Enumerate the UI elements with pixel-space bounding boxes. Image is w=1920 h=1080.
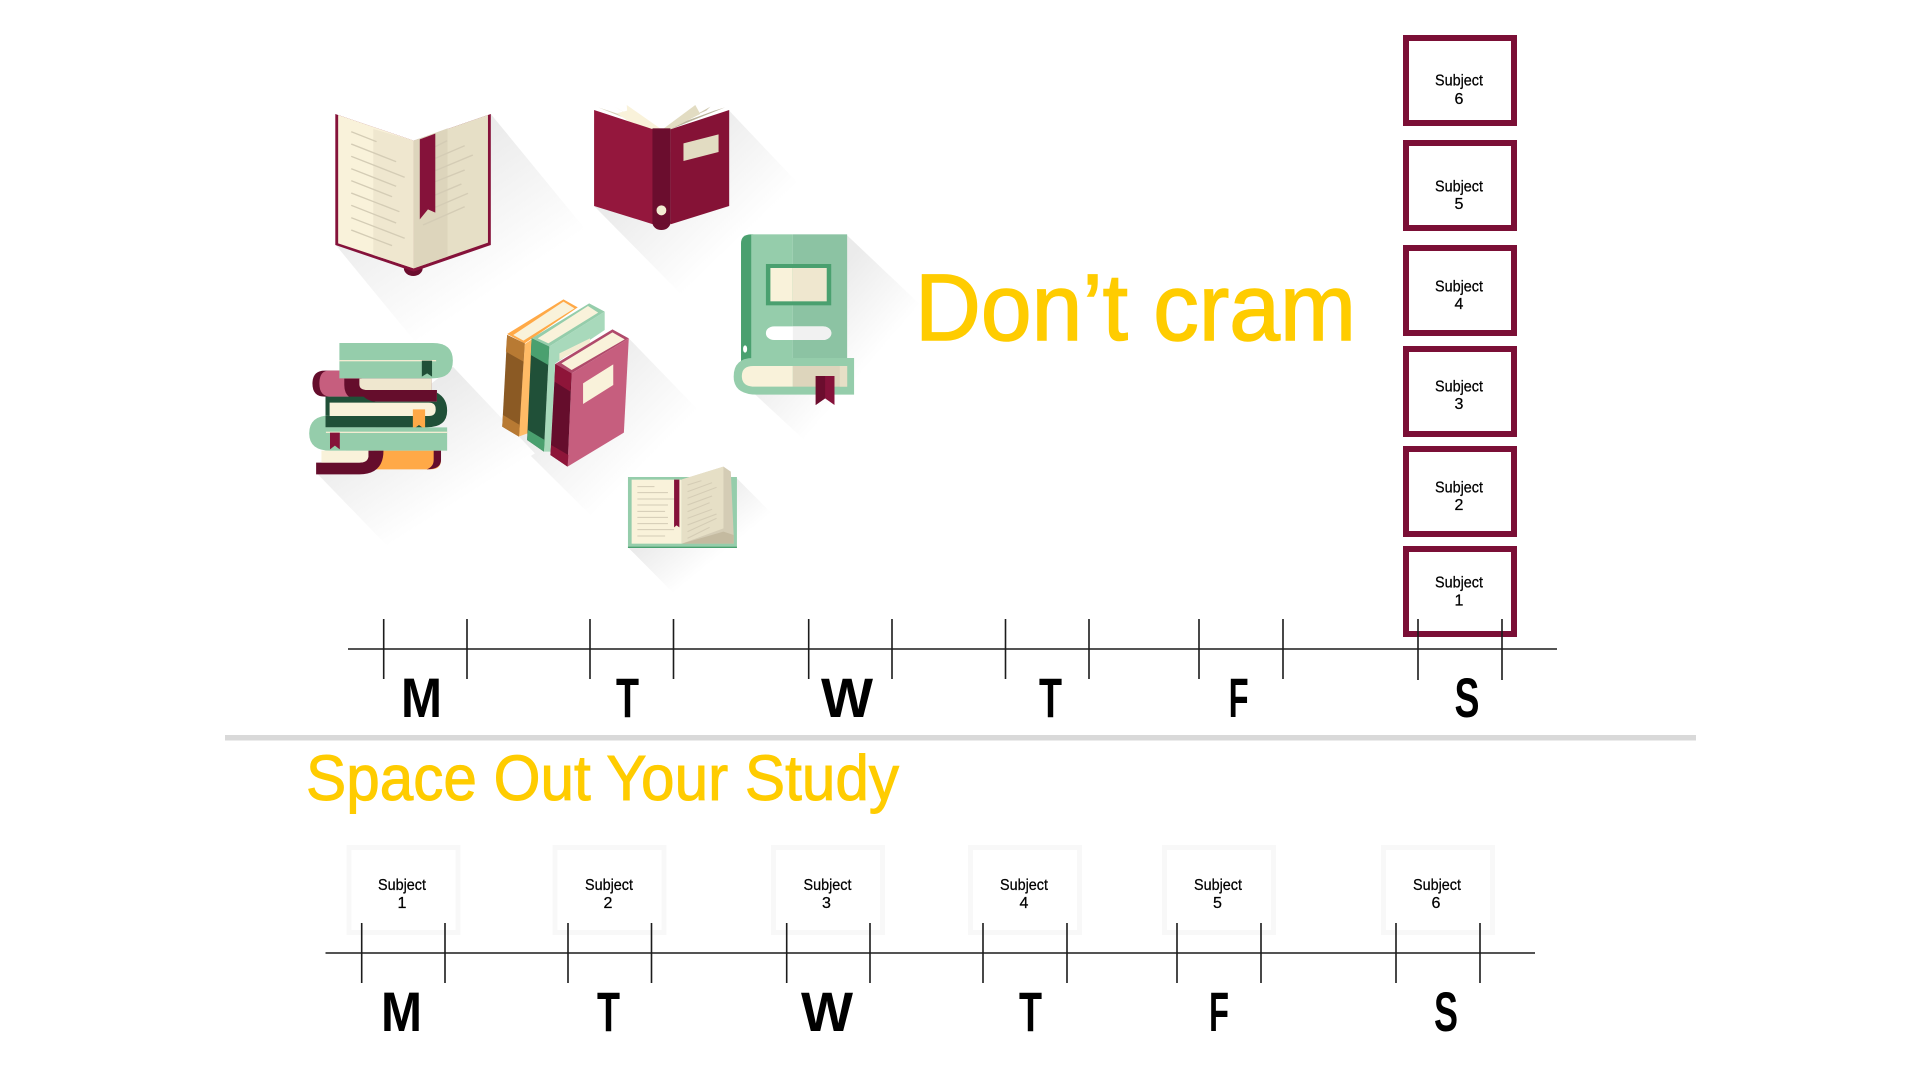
timeline: cramming week [348,619,1557,729]
subject card 1 [349,848,458,932]
subject card 3: Subject [804,877,852,894]
shadow: small open book [628,478,772,593]
panel: spaced subjects [349,848,1492,932]
subject box 5: 5 [1455,196,1464,213]
subject box 2 [1406,449,1514,534]
shadow: green book [755,235,921,440]
icon: closed maroon book standing open [594,105,729,230]
subject card 6: 6 [1432,895,1441,912]
subject box 2: 2 [1455,497,1464,514]
shadow: upright books [503,338,698,517]
subject box 5: Subject [1435,178,1483,196]
day label M: M [381,980,422,1043]
subject card 6 [1384,848,1492,932]
subject card 2: Subject [585,877,633,894]
icon: small open book [628,467,737,548]
day label S: S [1434,980,1458,1043]
shadow: open book [336,114,586,343]
icon: upright books [502,299,629,467]
timeline: spaced week [326,923,1535,1043]
subject box 6: 6 [1455,91,1464,108]
day label T: T [1019,980,1042,1043]
subject box 4: Subject [1435,278,1483,296]
subject card 2 [555,848,664,932]
day label F: F [1229,666,1249,729]
subject box 3: Subject [1435,378,1483,396]
shadow: book stack [317,367,535,547]
subject box 4 [1406,248,1514,333]
subject box 5 [1406,143,1514,228]
subject card 3: 3 [822,895,831,912]
panel: stacked subjects [1406,38,1514,634]
heading: Space Out Your Study: Space Out Your Study [306,742,899,814]
day label M: M [401,666,442,729]
orange book [502,299,578,437]
day label S: S [1454,666,1480,729]
subject card 6: Subject [1413,877,1461,894]
subject box 6 [1406,38,1514,123]
icon: open cream book [335,114,491,276]
subject card 4: 4 [1020,895,1029,912]
subject box 2: Subject [1435,480,1483,496]
icon: green standing book [734,234,854,405]
subject box 3 [1406,349,1514,434]
pink book [550,329,629,467]
day label W: W [801,980,853,1043]
subject box 1: 1 [1455,592,1464,610]
subject card 3 [774,848,882,932]
subject card 4 [970,848,1080,932]
subject box 6: Subject [1435,72,1483,90]
subject box 1 [1406,549,1514,634]
day label W: W [821,666,873,729]
subject card 4: Subject [1000,877,1048,894]
subject card 5: 5 [1213,895,1222,912]
subject card 1: Subject [378,877,426,894]
title: Don't cram: Don’t cram [915,255,1356,361]
day label F: F [1209,980,1229,1043]
day label T: T [616,666,639,729]
subject box 3: 3 [1455,396,1464,413]
shadow: maroon book [594,111,798,295]
day label T: T [597,980,620,1043]
divider [225,735,1696,740]
subject box 1: Subject [1435,574,1483,592]
green book [527,303,605,452]
subject box 4: 4 [1455,296,1464,313]
subject card 1: 1 [398,895,407,912]
icon: stack of books [309,343,453,474]
subject card 5: Subject [1194,877,1242,894]
subject card 2: 2 [604,895,613,912]
subject card 5 [1164,848,1274,932]
day label T: T [1039,666,1062,729]
illustration: books cluster [309,105,921,593]
